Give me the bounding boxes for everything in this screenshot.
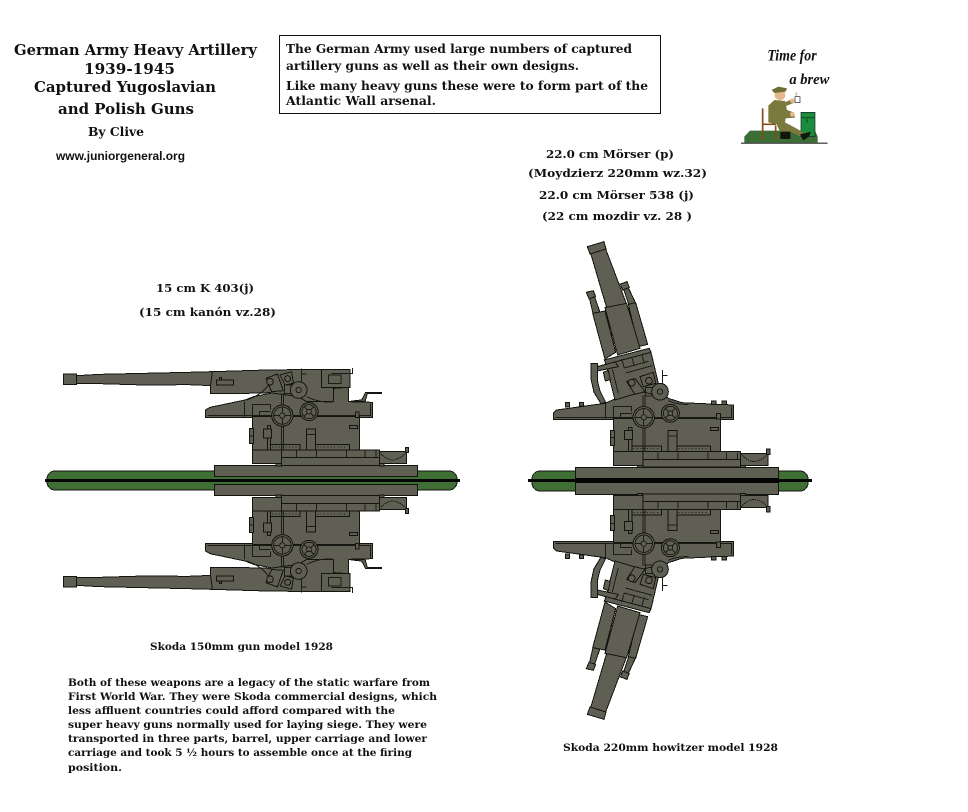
- intro text box: Atlantic Wall arsenal.: [285, 94, 436, 108]
- heading: gun names: (15 cm kanón vz.28): [139, 305, 276, 319]
- title: Captured Yugoslavian: [34, 78, 216, 96]
- intro text box: Like many heavy guns these were to form part of the: [286, 79, 648, 93]
- description paragraph: position.: [68, 763, 122, 774]
- intro text box: The German Army used large numbers of captured: [286, 42, 633, 56]
- website: www.juniorgeneral.org: [55, 149, 185, 163]
- heading: gun names: 15 cm K 403(j): [156, 281, 254, 295]
- description paragraph: Both of these weapons are a legacy of the static warfare from: [68, 678, 430, 689]
- heading: howitzer names: 22.0 cm Mörser (p): [546, 147, 674, 161]
- heading: howitzer names: [528, 147, 707, 223]
- icon: soldier having a brew: Time for: [767, 47, 818, 64]
- intro text box: artillery guns as well as their own designs.: [286, 59, 579, 73]
- heading: howitzer names: (Moydzierz 220mm wz.32): [528, 166, 707, 180]
- diagram: Skoda 220mm howitzer: [528, 242, 812, 719]
- icon: soldier having a brew: a brew: [789, 72, 830, 88]
- heading: gun names: [139, 281, 276, 319]
- heading: howitzer names: 22.0 cm Mörser 538 (j): [539, 188, 694, 202]
- title: 1939-1945: [84, 60, 175, 78]
- title: and Polish Guns: [58, 100, 194, 118]
- description paragraph: [68, 678, 438, 774]
- author credit: By Clive: [88, 125, 144, 139]
- title: German Army Heavy Artillery: [14, 41, 258, 59]
- description paragraph: super heavy guns normally used for laying siege. They were: [68, 720, 427, 731]
- title: [14, 41, 258, 118]
- intro text box: [280, 36, 660, 114]
- description paragraph: carriage and took 5 ½ hours to assemble once at the firing: [68, 748, 412, 759]
- caption: gun: Skoda 150mm gun model 1928: [150, 642, 333, 653]
- diagram: Skoda 150mm gun: [45, 368, 460, 593]
- caption: howitzer: Skoda 220mm howitzer model 1928: [563, 743, 778, 754]
- icon: soldier having a brew: [741, 47, 830, 144]
- description paragraph: less affluent countries could afford compared with the: [68, 706, 395, 717]
- description paragraph: transported in three parts, barrel, upper carriage and lower: [68, 734, 428, 745]
- description paragraph: First World War. They were Skoda commercial designs, which: [68, 692, 438, 703]
- heading: howitzer names: (22 cm mozdir vz. 28 ): [542, 209, 692, 223]
